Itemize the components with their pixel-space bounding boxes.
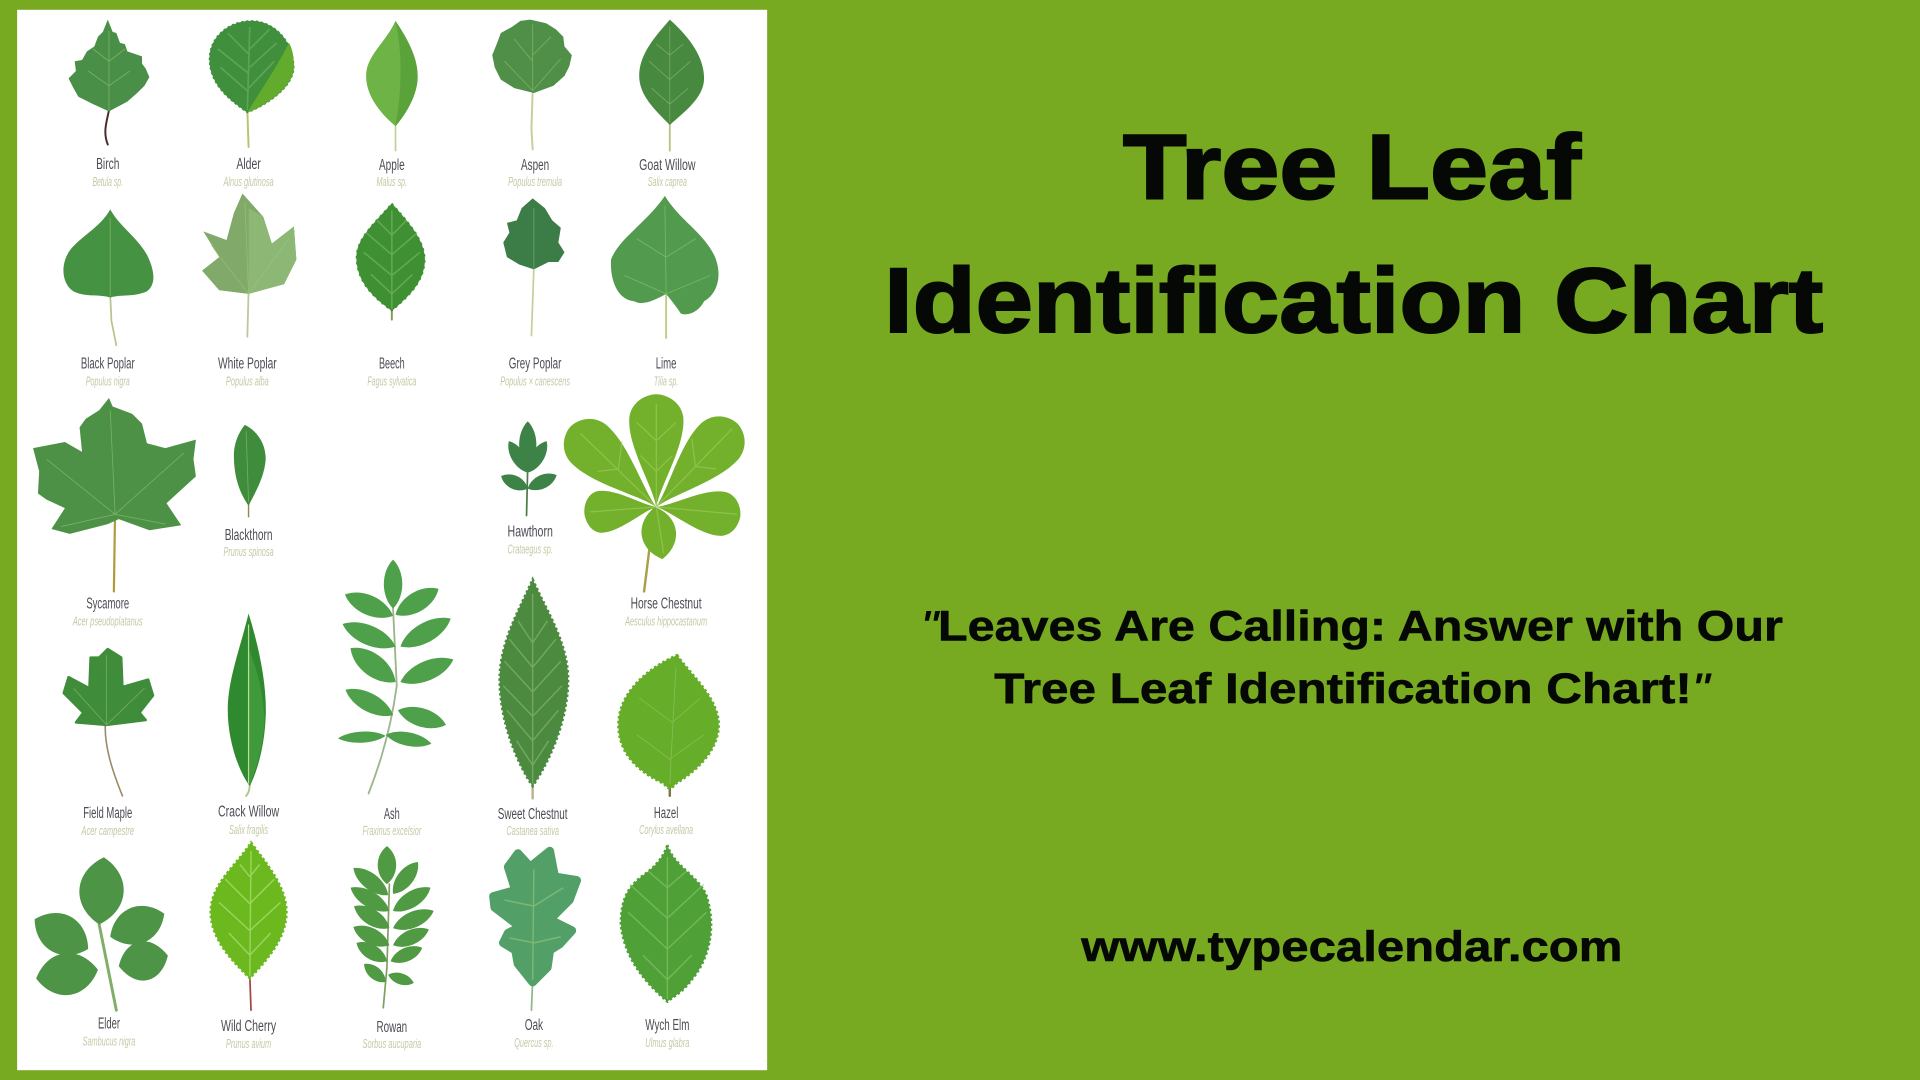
label: Blackthorn bbox=[223, 527, 274, 559]
label: Wild Cherry bbox=[221, 1018, 276, 1051]
label: Blackthorn: Prunus spinosa bbox=[223, 544, 274, 559]
label: Lime: Tilia sp. bbox=[654, 374, 678, 389]
label: Crack Willow bbox=[218, 804, 280, 837]
label: Beech: Fagus sylvatica bbox=[367, 374, 416, 389]
label: Oak bbox=[514, 1017, 553, 1050]
label: Elder bbox=[83, 1016, 135, 1049]
label: Sycamore bbox=[72, 596, 143, 629]
label: Aspen bbox=[508, 157, 562, 189]
leaf: Goat Willow bbox=[639, 20, 704, 151]
leaf: Hawthorn bbox=[498, 421, 559, 516]
label: Hawthorn bbox=[508, 523, 553, 556]
label: Ash: Fraxinus excelsior bbox=[362, 823, 422, 838]
label: Black Poplar bbox=[81, 356, 135, 389]
specimen: Hazel bbox=[618, 655, 719, 837]
label: Beech bbox=[367, 356, 416, 389]
leaf: Oak bbox=[493, 851, 577, 1010]
leaf: Rowan bbox=[346, 846, 437, 1008]
leaf: Grey Poplar bbox=[503, 198, 564, 336]
label: Birch: Betula sp. bbox=[92, 174, 123, 189]
specimen: Aspen bbox=[492, 20, 572, 189]
label: Rowan: Sorbus aucuparia bbox=[362, 1036, 421, 1051]
label: Alder: Alder bbox=[236, 156, 261, 173]
title: Tree Leaf bbox=[1123, 116, 1581, 218]
label: Wych Elm bbox=[645, 1017, 689, 1050]
label: Aspen: Populus tremula bbox=[508, 174, 562, 189]
label: Hawthorn: Crataegus sp. bbox=[508, 541, 553, 556]
label: White Poplar: Populus alba bbox=[226, 374, 269, 389]
panel: leaf chart bbox=[17, 10, 767, 1070]
label: Alder: Alnus glutinosa bbox=[223, 174, 274, 189]
specimen: Sycamore bbox=[33, 398, 196, 629]
label: Grey Poplar bbox=[500, 356, 570, 389]
leaf: Lime bbox=[611, 196, 719, 338]
leaf: Horse Chestnut bbox=[553, 394, 756, 591]
label: Field Maple bbox=[81, 805, 134, 838]
label: Sweet Chestnut: Sweet Chestnut bbox=[498, 806, 568, 823]
label: Goat Willow: Goat Willow bbox=[639, 157, 696, 174]
label: Apple bbox=[377, 157, 407, 189]
label: Rowan: Rowan bbox=[377, 1019, 407, 1036]
label: Horse Chestnut: Horse Chestnut bbox=[631, 596, 702, 613]
leaf: Sweet Chestnut bbox=[500, 579, 568, 798]
specimen: Sweet Chestnut bbox=[498, 579, 568, 838]
label: Birch bbox=[92, 156, 123, 189]
label: Wych Elm: Wych Elm bbox=[645, 1017, 689, 1034]
label: Oak: Quercus sp. bbox=[514, 1035, 553, 1050]
title: Identification Chart bbox=[884, 250, 1823, 352]
specimen: Horse Chestnut bbox=[553, 394, 756, 629]
label: Hazel: Corylus avellana bbox=[639, 822, 693, 837]
leaf: Elder bbox=[25, 856, 172, 1010]
label: White Poplar bbox=[218, 356, 277, 389]
label: Apple: Malus sp. bbox=[377, 174, 407, 189]
tagline bbox=[921, 602, 1783, 712]
label: Wych Elm: Ulmus glabra bbox=[645, 1035, 689, 1050]
label: Sweet Chestnut: Castanea sativa bbox=[506, 823, 559, 838]
specimen: Ash bbox=[338, 560, 457, 838]
specimen: Blackthorn bbox=[223, 425, 274, 559]
specimen: Alder bbox=[209, 21, 294, 189]
specimen: Crack Willow bbox=[218, 613, 280, 837]
specimen: Goat Willow bbox=[639, 20, 704, 189]
leaf: Sycamore bbox=[33, 398, 196, 591]
label: Blackthorn: Blackthorn bbox=[225, 527, 272, 544]
specimen: Field Maple bbox=[64, 649, 153, 838]
label: Lime bbox=[654, 356, 678, 389]
website: www.typecalendar.com bbox=[1080, 923, 1622, 970]
label: Horse Chestnut bbox=[625, 596, 707, 629]
label: Grey Poplar: Grey Poplar bbox=[509, 356, 562, 373]
label: Hazel bbox=[639, 805, 693, 837]
specimen: Black Poplar bbox=[63, 209, 153, 389]
leaf: Crack Willow bbox=[228, 613, 266, 796]
specimen: Grey Poplar bbox=[500, 198, 570, 389]
label: Hazel: Hazel bbox=[654, 805, 678, 822]
label: Beech: Beech bbox=[379, 356, 405, 373]
leaf: White Poplar bbox=[202, 193, 296, 337]
label: Grey Poplar: Populus × canescens bbox=[500, 374, 570, 389]
leaf: Aspen bbox=[492, 20, 572, 149]
label: Apple: Apple bbox=[379, 157, 405, 174]
tagline: Tree Leaf Identification Chart! " bbox=[994, 665, 1712, 712]
label: Elder: Sambucus nigra bbox=[83, 1034, 135, 1049]
label: Black Poplar: Populus nigra bbox=[86, 374, 130, 389]
leaf: Birch bbox=[69, 20, 149, 144]
specimen: Hawthorn bbox=[498, 421, 559, 556]
label: Crack Willow: Crack Willow bbox=[218, 804, 280, 821]
leaf: Beech bbox=[356, 203, 425, 320]
label: Wild Cherry: Wild Cherry bbox=[221, 1018, 276, 1035]
label: Horse Chestnut: Aesculus hippocastanum bbox=[625, 614, 707, 629]
leaf: Wild Cherry bbox=[211, 842, 287, 1010]
label: Sycamore: Sycamore bbox=[86, 596, 129, 613]
label: Black Poplar: Black Poplar bbox=[81, 356, 135, 373]
specimen: Rowan bbox=[346, 846, 437, 1051]
specimen: Apple bbox=[366, 21, 418, 189]
label: Wild Cherry: Prunus avium bbox=[226, 1036, 271, 1051]
label: Sycamore: Acer pseudoplatanus bbox=[72, 614, 143, 629]
specimen: White Poplar bbox=[202, 193, 296, 389]
label: Elder: Elder bbox=[98, 1016, 120, 1033]
label: Rowan bbox=[362, 1019, 421, 1051]
specimen: Wych Elm bbox=[621, 845, 711, 1050]
label: Field Maple: Acer campestre bbox=[81, 823, 134, 838]
label: White Poplar: White Poplar bbox=[218, 356, 277, 373]
specimen: Lime bbox=[611, 196, 719, 389]
label: Oak: Oak bbox=[525, 1017, 543, 1034]
leaf: Field Maple bbox=[64, 649, 153, 796]
title bbox=[884, 116, 1823, 352]
label: Ash: Ash bbox=[384, 806, 400, 823]
specimen: Birch bbox=[69, 20, 149, 189]
leaf: Alder bbox=[209, 21, 294, 147]
tagline: "Leaves Are Calling: Answer with Our bbox=[921, 602, 1783, 649]
leaf: Apple bbox=[366, 21, 418, 151]
leaf: Ash bbox=[338, 560, 457, 793]
label: Aspen: Aspen bbox=[521, 157, 549, 174]
label: Lime: Lime bbox=[656, 356, 677, 373]
leaf: Wych Elm bbox=[621, 845, 711, 1002]
label: Alder bbox=[223, 156, 274, 189]
label: Goat Willow: Salix caprea bbox=[648, 174, 687, 189]
label: Sweet Chestnut bbox=[498, 806, 568, 838]
label: Hawthorn: Hawthorn bbox=[508, 523, 553, 540]
specimen: Oak bbox=[493, 851, 577, 1050]
label: Field Maple: Field Maple bbox=[83, 805, 132, 822]
label: Birch: Birch bbox=[96, 156, 119, 173]
specimen: Wild Cherry bbox=[211, 842, 287, 1051]
leaf: Hazel bbox=[618, 655, 719, 796]
leaf: Black Poplar bbox=[63, 209, 153, 345]
label: Crack Willow: Salix fragilis bbox=[229, 822, 268, 837]
specimen: Elder bbox=[25, 856, 172, 1049]
specimen: Beech bbox=[356, 203, 425, 389]
leaf: Blackthorn bbox=[234, 425, 266, 517]
label: Ash bbox=[362, 806, 422, 838]
label: Goat Willow bbox=[639, 157, 696, 189]
